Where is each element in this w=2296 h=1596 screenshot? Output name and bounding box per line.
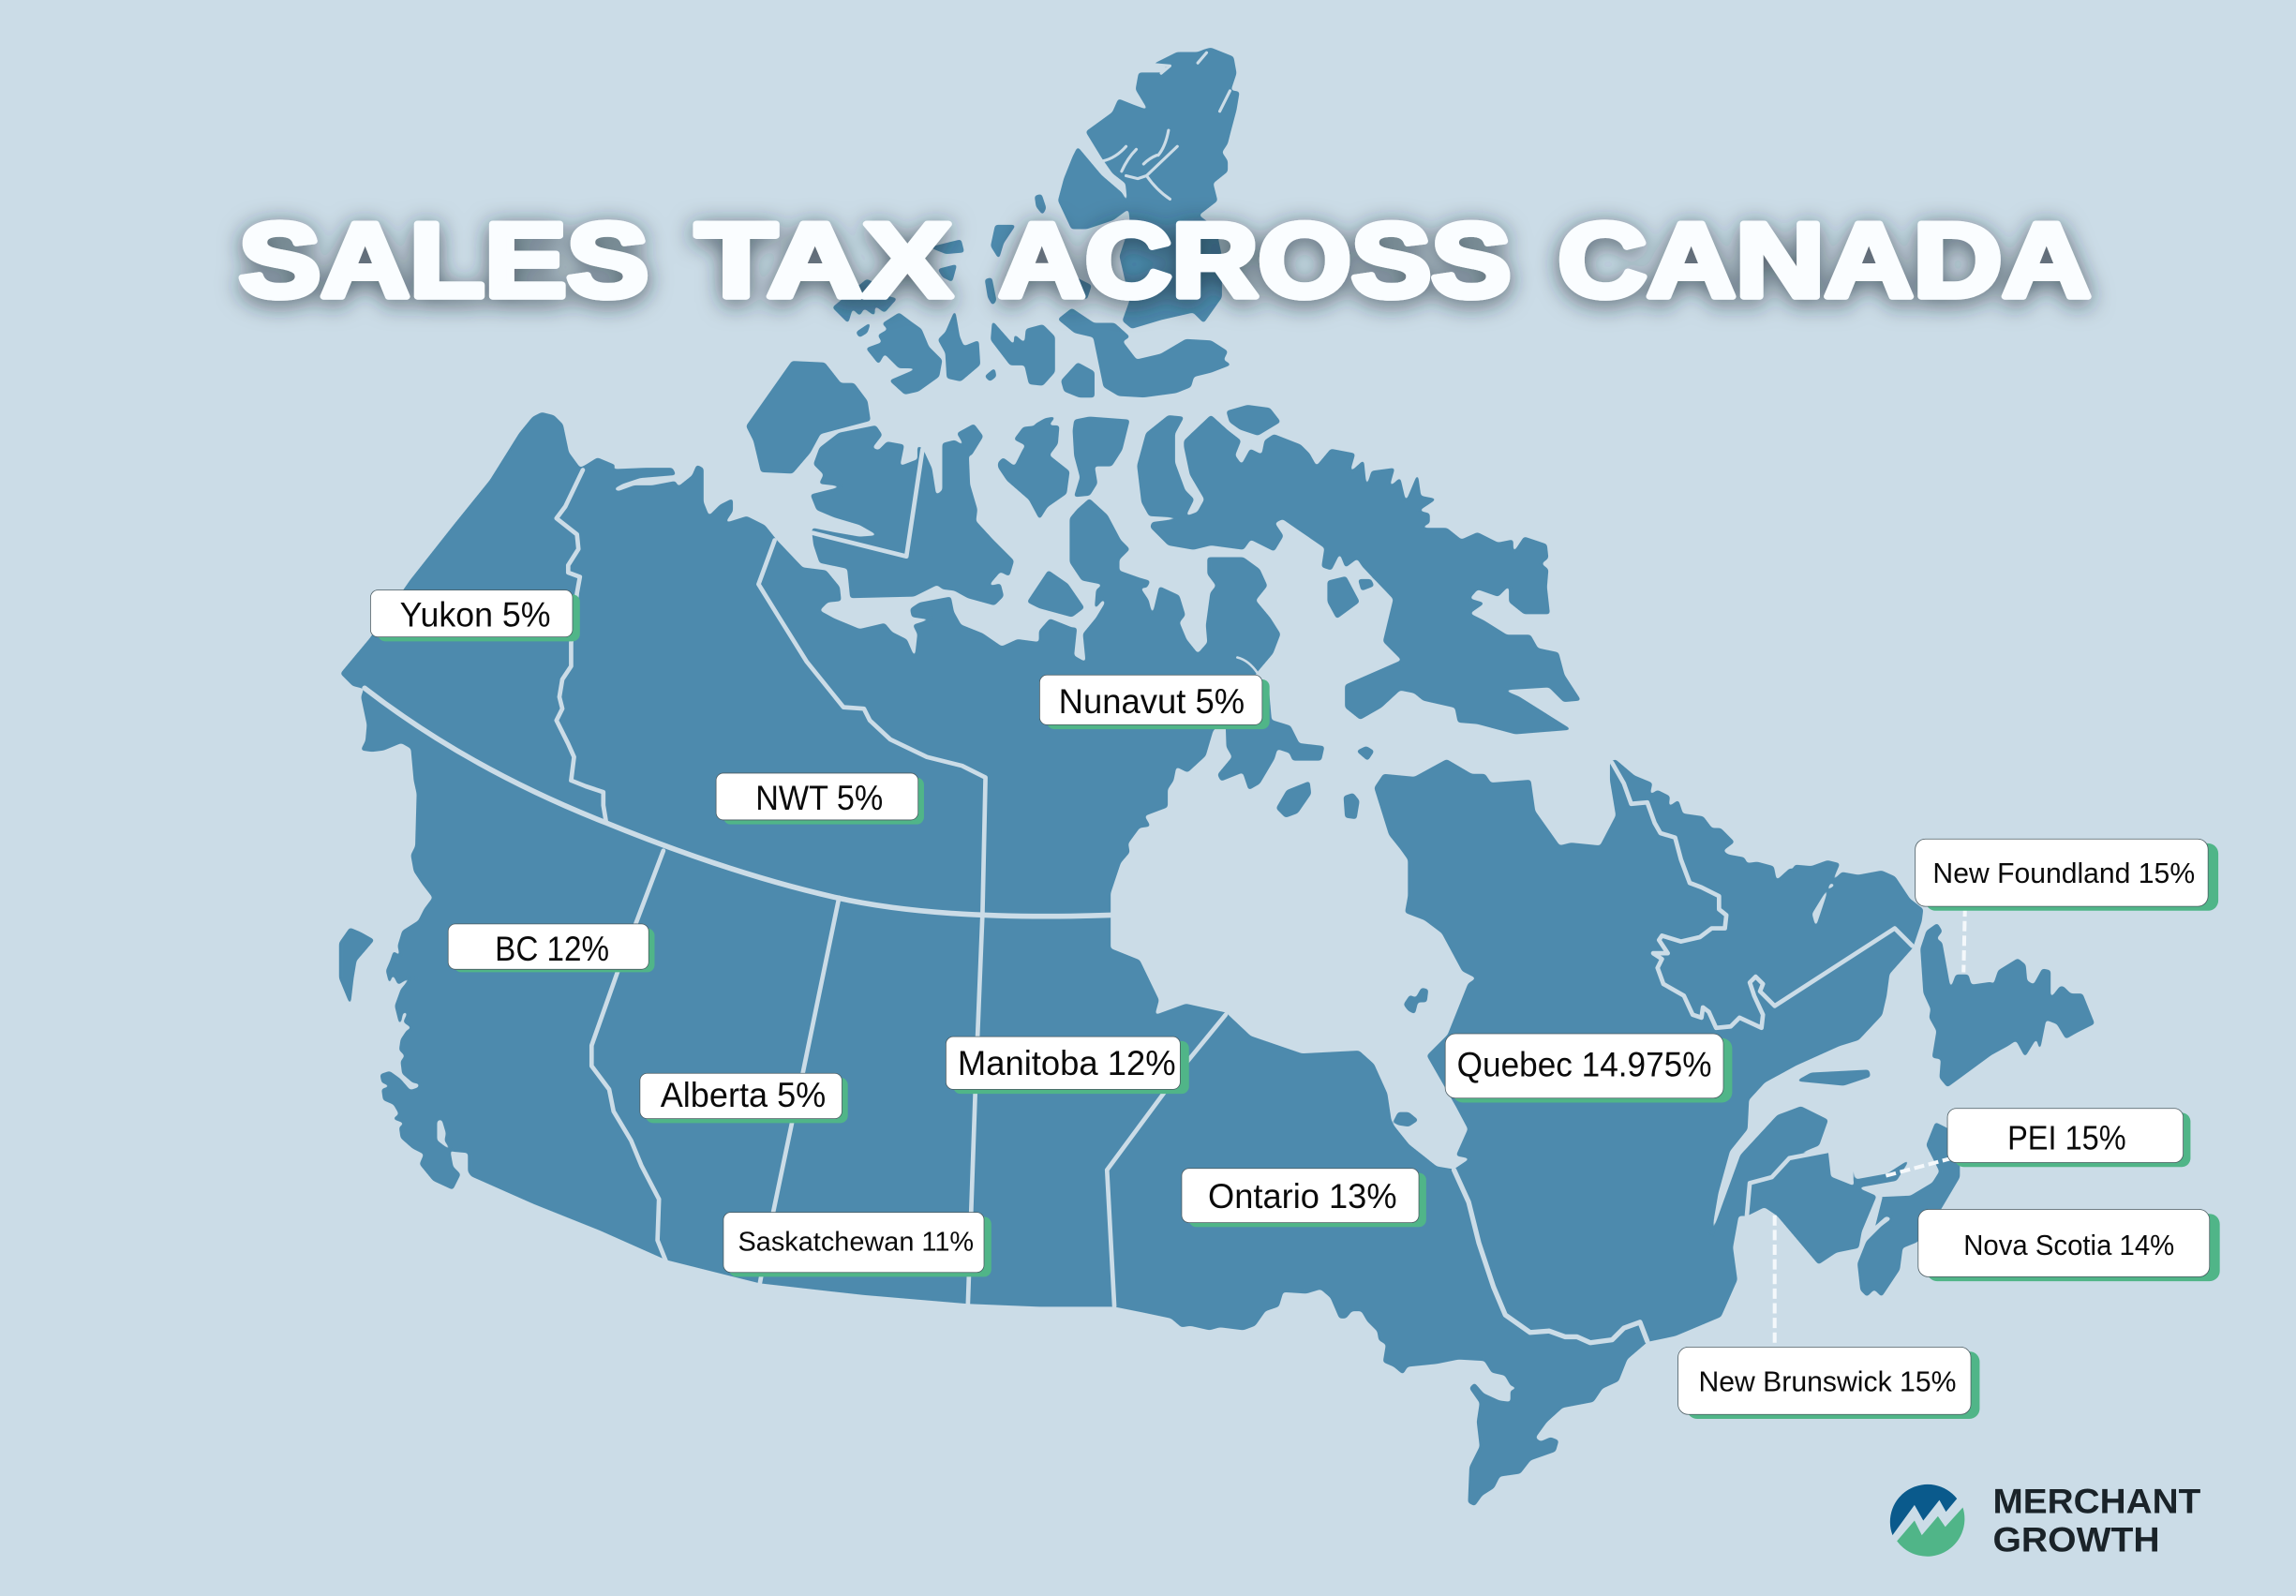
- Meighen sliver: [1036, 195, 1046, 214]
- Cornwallis Island: [1062, 363, 1094, 396]
- label: New Foundland: New Foundland 15%: [1932, 858, 2195, 889]
- Somerset Island: [1073, 417, 1129, 497]
- Ellef lower piece: [939, 265, 956, 281]
- Southampton Island: [1218, 688, 1323, 789]
- Victoria Island: [812, 426, 1013, 604]
- Fury and Hecla strait: [1237, 658, 1258, 674]
- label: PEI: [1947, 1109, 2190, 1167]
- Prince Patrick Island: [833, 279, 896, 322]
- Ellef piece: [932, 240, 963, 253]
- logo wordmark: GROWTH: [1992, 1520, 2160, 1559]
- New Brunswick leader: [1773, 1216, 1776, 1344]
- BC and Alberta border: [591, 851, 666, 1262]
- title: [239, 201, 2091, 319]
- label: Alberta: Alberta 5%: [661, 1076, 826, 1114]
- label: Saskatchewan: [723, 1213, 991, 1276]
- label: Quebec: Quebec 14.975%: [1457, 1044, 1712, 1083]
- small island: [986, 369, 996, 380]
- New Brunswick and Nova Scotia strait: [1872, 1198, 1880, 1227]
- Bylot crescent island: [1138, 416, 1193, 517]
- Akimiski Island: [1394, 1112, 1417, 1126]
- callout leaders: [1775, 906, 1965, 1344]
- Prince of Wales Island: [999, 426, 1069, 518]
- Newfoundland: [1921, 924, 2094, 1086]
- Ellesmere fjords: [1103, 52, 1230, 199]
- label: BC: BC 12%: [495, 930, 609, 968]
- Quebec and New Brunswick border: [1747, 1151, 1827, 1216]
- logo icon: [1890, 1484, 1964, 1557]
- Devon cap island: [1227, 406, 1280, 435]
- label: Nova Scotia: Nova Scotia 14%: [1963, 1230, 2174, 1261]
- Prince Edward Island: [1853, 1161, 1908, 1187]
- label: BC: [448, 924, 654, 972]
- label: Ontario: [1182, 1169, 1426, 1227]
- title: CANADA: [1558, 201, 2091, 319]
- small sliver: [986, 278, 996, 305]
- Nova Scotia: [1858, 1123, 1960, 1296]
- King William Island: [1028, 571, 1083, 617]
- Newfoundland leader: [1963, 906, 1965, 972]
- Axel Heiberg Island: [1059, 148, 1129, 229]
- Mansel Island: [1276, 782, 1310, 817]
- Manitoba and Ontario border: [1107, 1015, 1226, 1306]
- label: Manitoba: Manitoba 12%: [958, 1044, 1176, 1082]
- Ellesmere Island: [1086, 49, 1239, 328]
- Byam Martin area: [939, 312, 979, 380]
- title: TAX: [695, 201, 952, 319]
- label: Nunavut: Nunavut 5%: [1059, 682, 1245, 721]
- label: New Brunswick: [1678, 1347, 1979, 1419]
- Ontario and Quebec border: [1454, 1170, 1647, 1343]
- label: Ontario: Ontario 13%: [1208, 1177, 1397, 1216]
- Amund Ringnes piece: [991, 226, 1015, 258]
- Ottawa Island: [1344, 794, 1359, 818]
- label: Quebec: [1445, 1034, 1732, 1102]
- logo wordmark: MERCHANT: [1992, 1483, 2201, 1521]
- label: Manitoba: [946, 1037, 1189, 1094]
- label: Yukon: [370, 590, 580, 641]
- Quebec and Labrador border: [1612, 763, 1913, 1028]
- NWT and Nunavut border: [758, 541, 986, 1305]
- logo wordmark: [1992, 1483, 2201, 1559]
- map of Canada: [340, 49, 2094, 1505]
- title: SALES: [239, 201, 649, 319]
- small patch: [1073, 278, 1091, 299]
- label: NWT: [716, 773, 924, 825]
- Bathurst Island: [991, 322, 1054, 385]
- Baffin Island: [1151, 416, 1580, 734]
- label: Yukon: Yukon 5%: [400, 596, 551, 634]
- small Foxe island: [1359, 580, 1374, 590]
- title: ACROSS: [999, 201, 1511, 319]
- Nottingham Island: [1357, 747, 1374, 760]
- Melville Island: [867, 313, 942, 394]
- Victoria Island territorial line: [813, 450, 922, 557]
- label: New Foundland: [1916, 839, 2218, 911]
- label: NWT: NWT 5%: [755, 779, 883, 817]
- small island west: [857, 323, 870, 336]
- 60th parallel border: [365, 688, 1111, 917]
- Anticosti Island: [1798, 1070, 1870, 1085]
- logo: Merchant Growth: [1890, 1483, 2201, 1559]
- label: PEI: PEI 15%: [2007, 1118, 2126, 1156]
- Stefansson Island: [958, 425, 982, 455]
- Yukon and NWT border: [557, 470, 606, 823]
- small island: [1036, 417, 1054, 427]
- provincial borders: [365, 450, 1913, 1343]
- mainland: [341, 413, 1923, 1505]
- label: Nova Scotia: [1918, 1210, 2220, 1281]
- PEI leader: [1886, 1158, 1952, 1176]
- Belcher Islands: [1404, 989, 1427, 1013]
- label: Alberta: [640, 1073, 848, 1123]
- label: Nunavut: [1039, 675, 1270, 729]
- label: New Brunswick: New Brunswick 15%: [1698, 1365, 1956, 1397]
- label: Saskatchewan: Saskatchewan 11%: [738, 1227, 974, 1257]
- Alberta and Saskatchewan border: [760, 898, 839, 1283]
- Haida Gwaii: [340, 929, 373, 1003]
- Banks Island: [747, 362, 870, 473]
- Devon Island: [1059, 309, 1230, 396]
- Foxe Basin island: [1328, 577, 1359, 618]
